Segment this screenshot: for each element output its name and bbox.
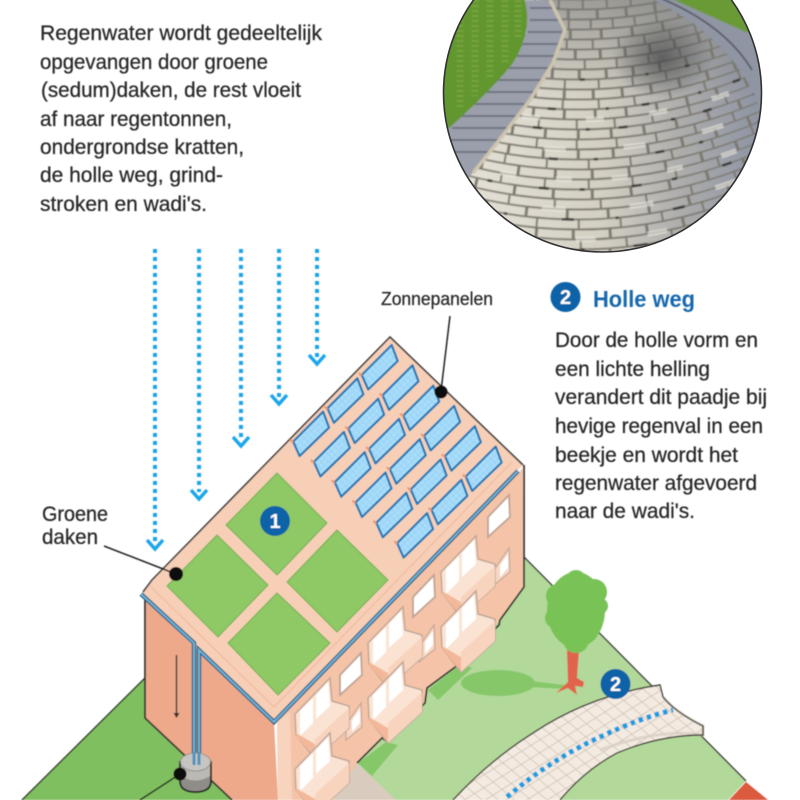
grey shading at top of path [540,0,732,85]
solar panels [290,345,502,558]
right wall [277,468,524,800]
label pointer: rain barrel [140,768,186,800]
parapet line [150,462,512,707]
body text: holle weg explanation: Door de holle vorm en [555,328,758,352]
body text: rainwater intro: de holle weg, grind- [40,163,223,187]
body text: rainwater intro: stroken en wadi's. [40,192,207,216]
body text: holle weg explanation [555,328,767,523]
body text: rainwater intro: Regenwater wordt gedeeltelijk [40,21,322,45]
water flow arrow [174,655,180,718]
stone base [468,0,760,252]
road: holle weg [453,685,703,800]
body text: holle weg explanation: een lichte helling [555,357,710,381]
road badge 2: 2 [610,674,621,696]
label: Zonnepanelen: Zonnepanelen [381,288,493,309]
ground: right lawn [330,557,746,800]
label: Groene daken [42,503,183,581]
corner strip [277,712,292,800]
right wall base outline [357,465,524,763]
heading: Holle weg: Holle weg [593,286,695,312]
footpath [333,763,396,800]
kerb joints [450,8,562,152]
roof badge 1 [260,506,290,536]
body text: holle weg explanation: verandert dit paadje bij [555,385,767,409]
rain barrel [180,752,211,792]
roof [141,337,523,722]
body text: rainwater intro: af naar regentonnen, [40,107,232,131]
balconies [295,536,495,800]
windows [340,495,510,740]
grey kerb left [448,0,564,177]
left wall [145,600,278,800]
heading: Holle weg: 2 [560,287,571,309]
bright stone highlights [500,90,738,243]
body text: holle weg explanation: naar de wadi's. [555,499,695,523]
green roof 2 [167,535,268,637]
body text: rainwater intro: ondergrondse kratten, [40,135,244,159]
body text: rainwater intro: (sedum)daken, de rest vloeit [41,78,301,102]
green roof 4 [228,593,330,695]
left wall outline [145,600,232,800]
kerb seam [473,0,565,173]
body text: holle weg explanation: beekje en wordt het [555,443,738,467]
brick ground strip [729,782,768,800]
gutter and downpipes [141,471,518,765]
kerb line right [660,0,752,70]
tree [545,570,608,695]
dark joints [486,64,758,250]
building shadow on lawn [358,663,472,776]
left lawn edge [22,678,145,800]
body text: rainwater intro: opgevangen door groene [40,50,268,74]
grass texture [460,0,518,110]
heading: Holle weg [550,282,695,312]
green roof 3 [287,530,388,632]
grass left [440,0,527,135]
green roof 1 [226,473,327,575]
dark wet patch [617,24,706,94]
rain arrows [147,249,325,549]
label: Groene daken: daken [42,526,98,549]
label: Groene daken: Groene [42,503,108,526]
building [141,337,524,800]
photo: cobblestone path in circle [440,0,775,260]
water stream on road [507,710,673,797]
body text: holle weg explanation: regenwater afgevoerd [555,471,757,495]
body text: rainwater intro [40,21,322,216]
grey kerb right [654,0,761,104]
label: Zonnepanelen [381,288,493,398]
cobblestone rows [465,0,775,255]
body text: holle weg explanation: hevige regenval in een [555,414,763,438]
grass right [673,0,748,34]
lawn edge [524,557,746,781]
tree shadow [461,670,565,696]
roof outline [143,337,523,592]
ground: left lawn [22,678,232,800]
roof badge 1: 1 [269,511,281,533]
road badge 2 [600,669,630,699]
